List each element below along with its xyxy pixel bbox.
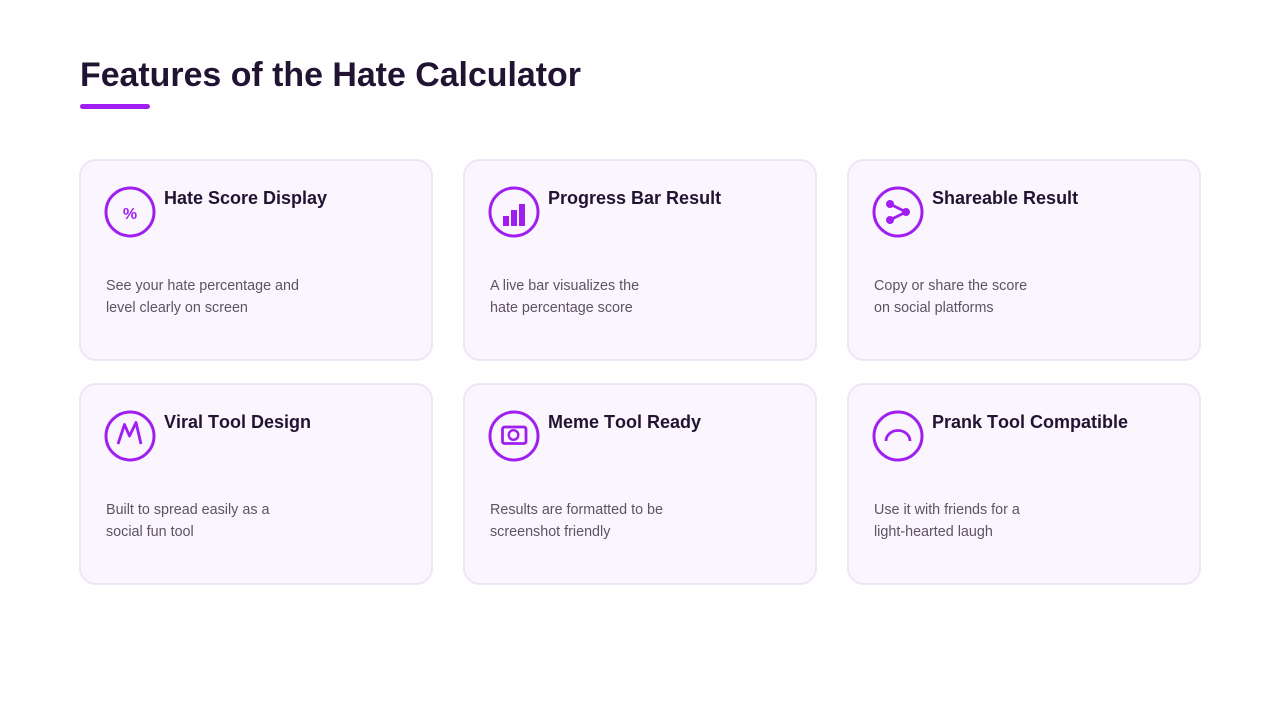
description: A live bar visualizes the [490,278,639,294]
description [490,502,663,540]
heading: Shareable Result [932,188,1078,208]
heading: Meme Tool Ready [548,412,701,432]
icon: M zigzag [104,410,156,462]
panel: Progress Bar Result [463,159,817,361]
description: on social platforms [874,300,994,316]
title: Features of the Hate Calculator [80,56,581,94]
description [490,278,639,316]
description [874,502,1020,540]
icon: share [872,186,924,238]
panel: Prank Tool Compatible [847,383,1201,585]
icon: arc [872,410,924,462]
description [874,278,1027,316]
description: Copy or share the score [874,278,1027,294]
panel: Viral Tool Design [79,383,433,585]
description: Built to spread easily as a [106,502,269,518]
title underline [80,104,150,109]
panel: Hate Score Display [79,159,433,361]
panel: Meme Tool Ready [463,383,817,585]
panel: Shareable Result [847,159,1201,361]
heading: Prank Tool Compatible [932,412,1128,432]
icon: percent: % [123,206,137,223]
description [106,502,270,540]
description: social fun tool [106,524,194,540]
description [106,278,299,316]
icon: percent [104,186,156,238]
icon: bars [488,186,540,238]
heading: Viral Tool Design [164,412,311,432]
heading: Hate Score Display [164,188,327,208]
description: hate percentage score [490,300,633,316]
icon: camera frame [488,410,540,462]
heading: Progress Bar Result [548,188,721,208]
description: Results are formatted to be [490,502,663,518]
description: level clearly on screen [106,300,248,316]
description: See your hate percentage and [106,278,299,294]
description: screenshot friendly [490,524,610,540]
description: light-hearted laugh [874,524,993,540]
description: Use it with friends for a [874,502,1020,518]
